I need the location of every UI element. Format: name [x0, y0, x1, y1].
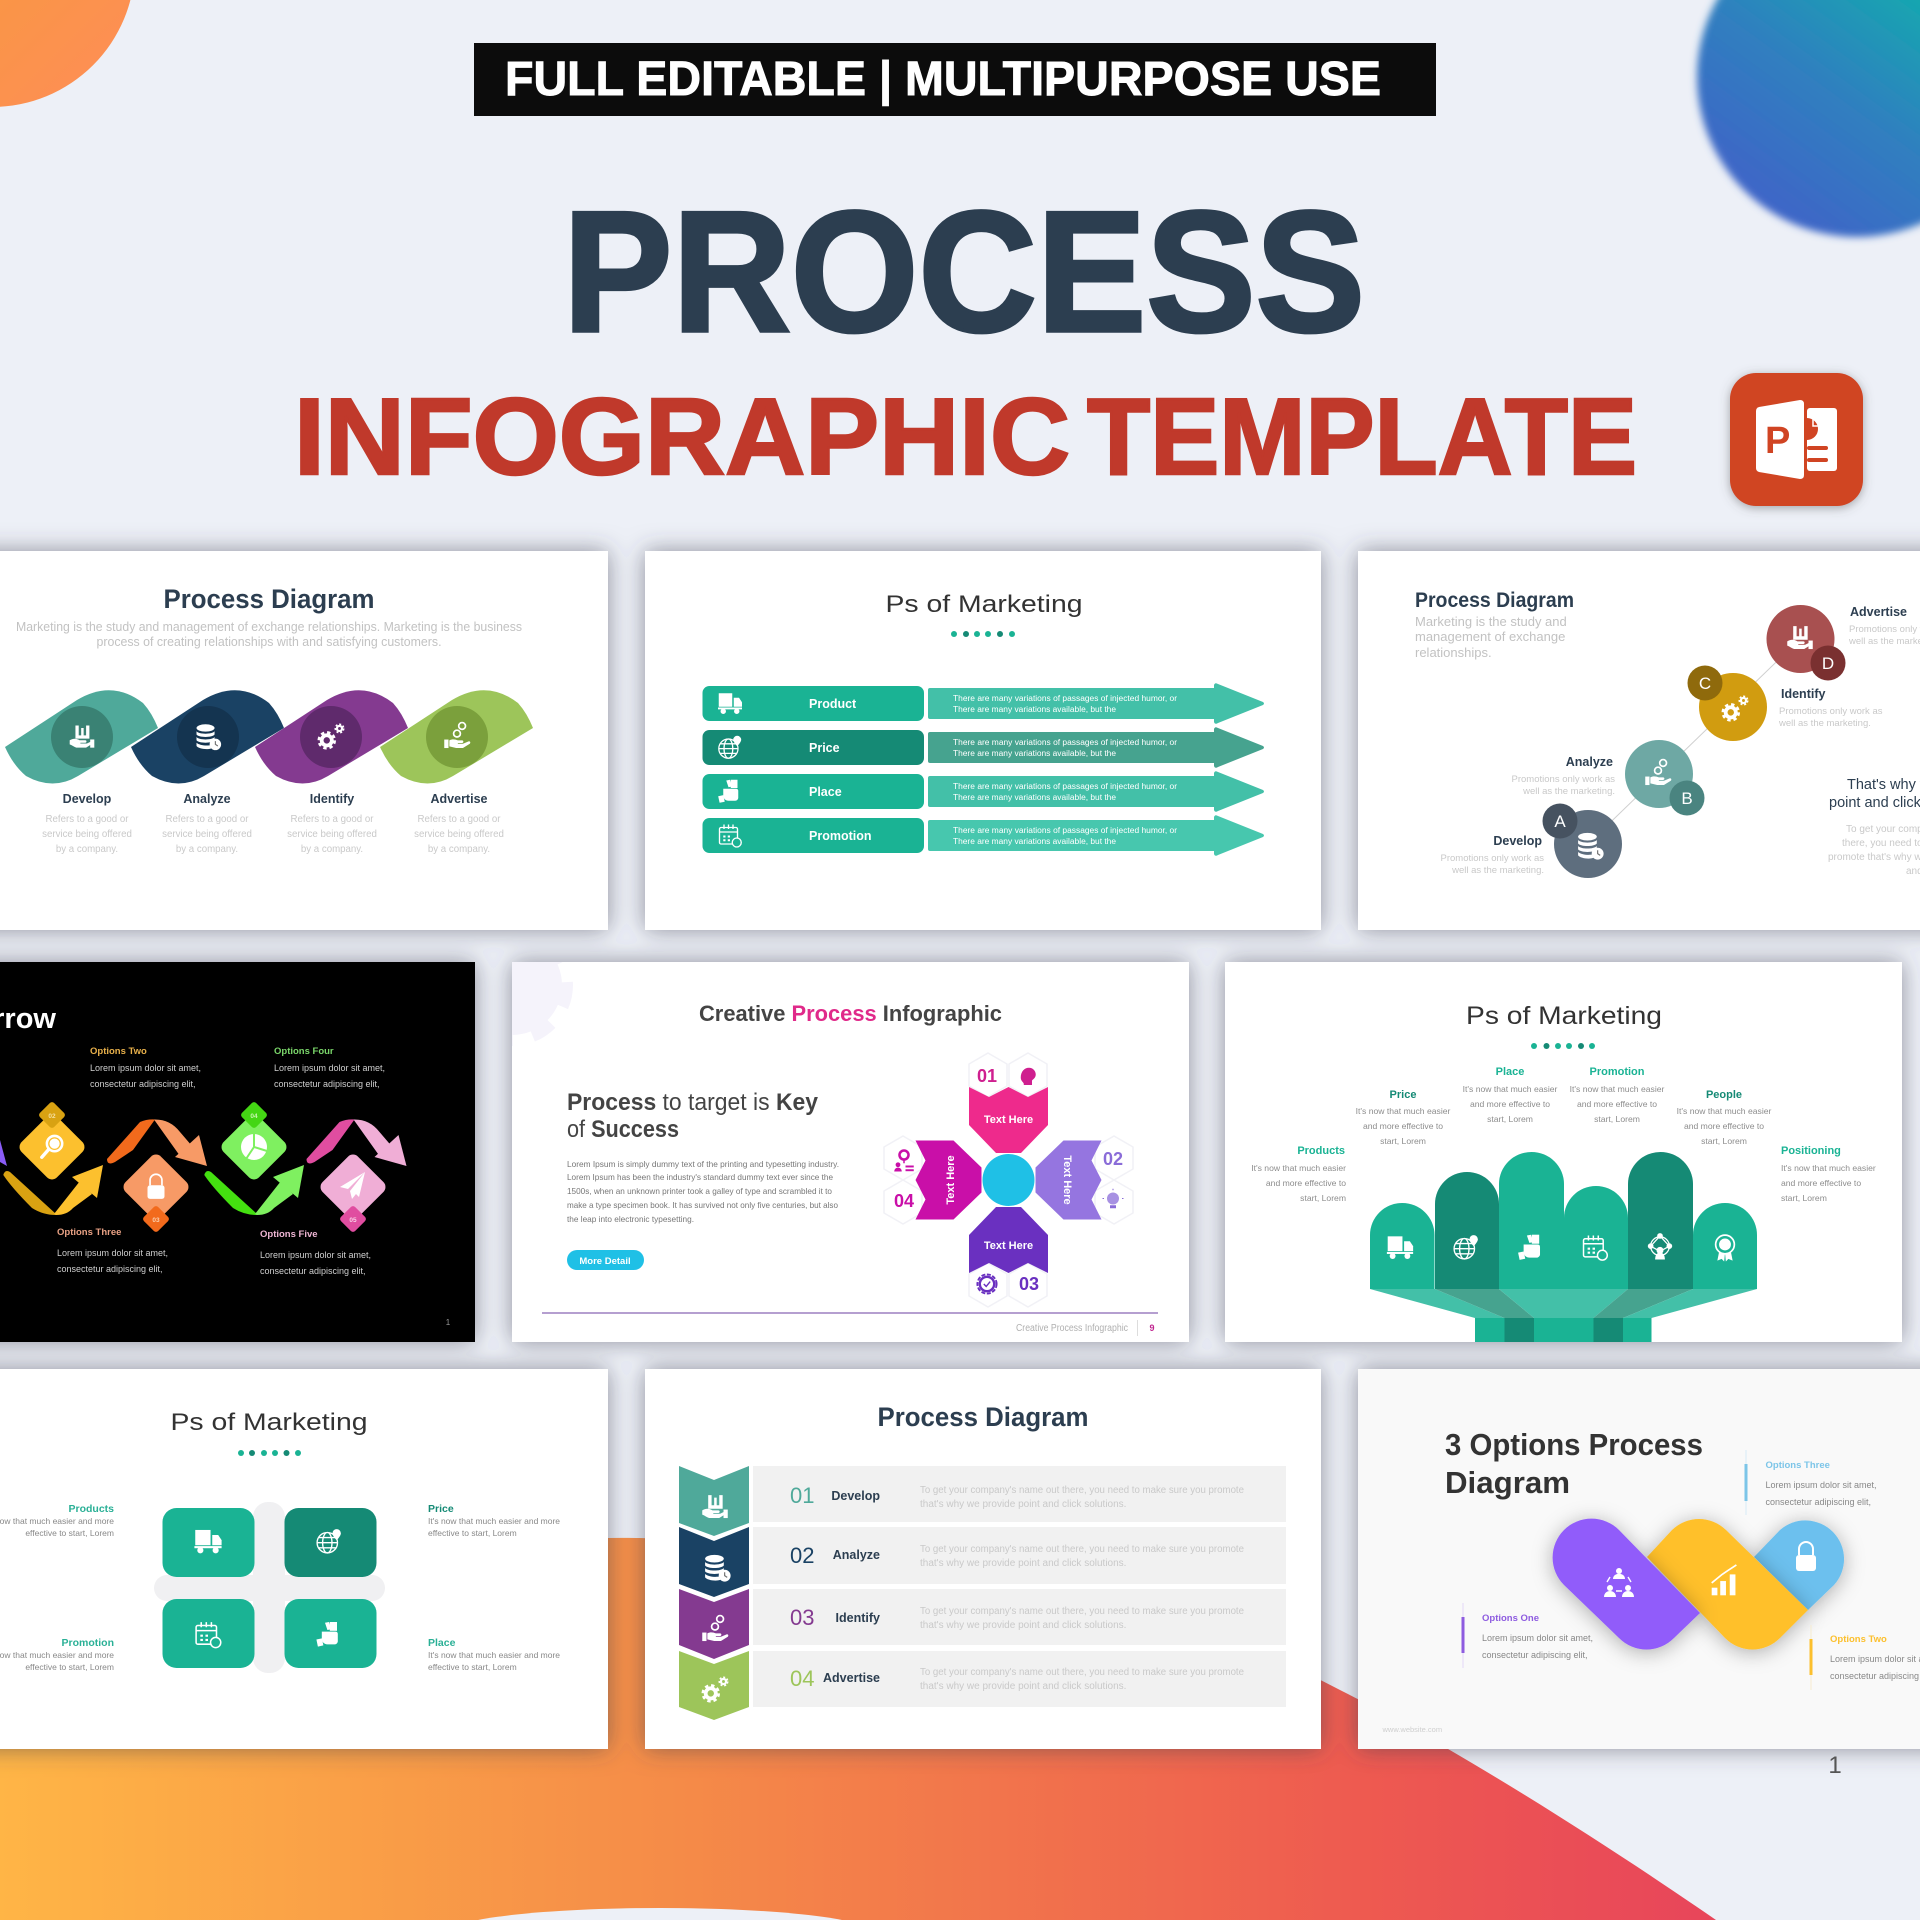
panel: process diagram ribbons — [0, 551, 608, 930]
step captions: service being offered — [414, 829, 504, 840]
option captions: consectetur adipiscing elit, — [260, 1266, 366, 1276]
panel: process diagram list — [645, 1369, 1321, 1749]
page number: 1 — [1828, 1752, 1842, 1779]
row: promotion: There are many variations of passages of injected humor, or — [953, 826, 1177, 835]
row descriptions: that's why we provide point and click solutions. — [920, 1620, 1126, 1631]
row labels: Identify — [836, 1611, 880, 1625]
heading: 3 Options Process — [1445, 1427, 1703, 1462]
option one — [1462, 1603, 1593, 1668]
row descriptions: To get your company's name out there, you need to make sure you promote — [920, 1485, 1244, 1496]
row labels: Develop — [831, 1489, 880, 1503]
body text: 1500s, when an unknown printer took a galley of type and scrambled it to — [567, 1186, 832, 1196]
arm: purple — [969, 1207, 1048, 1273]
step captions: service being offered — [162, 829, 252, 840]
row: promotion: Promotion — [809, 829, 872, 843]
decorative orange-red wave bottom — [0, 1538, 1716, 1920]
node: identify: C — [1699, 674, 1711, 693]
body text: Lorem Ipsum is simply dummy text of the printing and typesetting industry. — [567, 1159, 839, 1169]
grey rows — [753, 1466, 1286, 1707]
option captions: Options Three — [57, 1227, 121, 1238]
node: analyze: B — [1681, 789, 1693, 808]
node: develop: A — [1554, 812, 1566, 831]
tile: calendar — [162, 1599, 254, 1668]
icon: team — [1604, 1568, 1634, 1597]
tagline: Process to target is Key — [567, 1089, 819, 1116]
numbers: 01 — [977, 1066, 997, 1086]
node: advertise: D — [1822, 654, 1834, 673]
node: identify — [1688, 666, 1767, 741]
row labels — [823, 1489, 880, 1685]
top banner — [474, 43, 1436, 116]
numbers: 03 — [1019, 1274, 1039, 1294]
step captions: by a company. — [176, 844, 238, 855]
dots — [1531, 1043, 1595, 1049]
decorative blue circle top right — [1697, 0, 1920, 237]
heading: Process Diagram — [164, 584, 374, 614]
row numbers: 01 — [790, 1483, 814, 1508]
row descriptions — [920, 1485, 1244, 1692]
step captions: Develop — [63, 792, 112, 806]
step captions: Refers to a good or — [166, 814, 249, 825]
body text — [567, 1159, 839, 1224]
option captions: Options Two — [90, 1046, 147, 1057]
row: product: There are many variations of passages of injected humor, or — [953, 694, 1177, 703]
hex icons — [894, 1068, 1124, 1294]
bar: products — [1370, 1203, 1434, 1289]
shape: blue — [1754, 1520, 1844, 1610]
button — [567, 1250, 644, 1270]
captions: and more effective to — [1266, 1178, 1346, 1188]
intro text — [1415, 614, 1567, 660]
bar: positioning — [1693, 1203, 1757, 1289]
option one: Lorem ipsum dolor sit amet, — [1482, 1633, 1593, 1643]
option captions: consectetur adipiscing elit, — [57, 1264, 163, 1274]
node captions: Promotions only work as — [1512, 774, 1615, 785]
chevron: advertise — [679, 1651, 749, 1720]
captions: Products — [1297, 1145, 1345, 1157]
captions: It's now that much easier — [1570, 1084, 1665, 1094]
diamond 02: 02 — [48, 1113, 56, 1120]
node captions: well as the marketing. — [1451, 865, 1544, 876]
row descriptions: To get your company's name out there, you need to make sure you promote — [920, 1544, 1244, 1555]
panel shadows — [0, 551, 1920, 1749]
captions: start, Lorem — [1380, 1136, 1426, 1146]
row: product — [702, 683, 1264, 724]
arrow: green — [204, 1165, 304, 1215]
arm: magenta — [916, 1140, 982, 1220]
captions: effective to start, Lorem — [25, 1528, 114, 1538]
node captions: well as the marketing. — [1778, 718, 1871, 729]
option captions: Lorem ipsum dolor sit amet, — [90, 1063, 201, 1073]
hexagon tabs — [884, 1053, 1133, 1307]
bar: promotion — [1564, 1186, 1628, 1289]
icon: PowerPoint — [1730, 373, 1863, 506]
option one: Options One — [1482, 1613, 1539, 1624]
captions: Positioning — [1781, 1145, 1841, 1157]
captions: It's now that much easier and more — [428, 1516, 560, 1526]
panel: Ps of marketing grid — [0, 1369, 608, 1749]
numbers — [894, 1066, 1123, 1294]
body text: Lorem Ipsum has been the industry's standard dummy text ever since the — [567, 1172, 833, 1182]
panel: creative process infographic — [512, 962, 1158, 1336]
diamond 05 — [318, 1152, 388, 1233]
top banner: FULL EDITABLE | MULTIPURPOSE USE — [505, 53, 1381, 106]
arrow: purple tip — [0, 1140, 7, 1166]
intro text: process of creating relationships with and satisfying customers. — [96, 634, 442, 649]
node captions: well as the marketing. — [1522, 786, 1615, 797]
arm labels: Text Here — [984, 1240, 1033, 1252]
footer: 9 — [1149, 1323, 1155, 1333]
captions: It's now that much easier — [1463, 1084, 1558, 1094]
dots — [951, 631, 1015, 637]
option captions: consectetur adipiscing elit, — [90, 1079, 196, 1089]
row: place: Place — [809, 785, 842, 799]
captions: and more effective to — [1781, 1178, 1861, 1188]
node captions: Analyze — [1566, 755, 1613, 769]
bar: price — [1435, 1172, 1499, 1289]
page number: 1 — [446, 1318, 451, 1327]
arrow: yellow — [3, 1165, 103, 1215]
node captions: Identify — [1781, 687, 1825, 701]
panel: 3 options process — [1358, 1369, 1920, 1749]
arrow: pink — [306, 1119, 406, 1166]
panel: Ps of marketing arrows — [645, 551, 1321, 930]
diamond 03: 03 — [152, 1217, 160, 1224]
tile: globe — [284, 1508, 376, 1577]
tile: money — [284, 1599, 376, 1668]
step captions: by a company. — [301, 844, 363, 855]
tagline: of Success — [567, 1116, 679, 1143]
footer: Creative Process Infographic — [1016, 1323, 1128, 1334]
bar: place — [1499, 1152, 1564, 1289]
chevron: analyze — [679, 1527, 749, 1597]
row: place: There are many variations available, but the — [953, 793, 1117, 802]
arm: violet — [1036, 1140, 1102, 1220]
captions: start, Lorem — [1487, 1114, 1533, 1124]
captions — [0, 1503, 560, 1672]
option three: consectetur adipiscing elit, — [1766, 1497, 1871, 1507]
row: price — [702, 727, 1264, 768]
button: More Detail — [579, 1256, 631, 1267]
step captions: service being offered — [42, 829, 132, 840]
heading — [1445, 1427, 1703, 1500]
node captions: Promotions only work as — [1441, 853, 1544, 864]
diamond 02 — [17, 1101, 87, 1182]
ribbon: identify — [255, 690, 408, 784]
heading: Ps of Marketing — [170, 1409, 368, 1436]
row labels: Analyze — [833, 1548, 880, 1562]
step captions: service being offered — [287, 829, 377, 840]
gear watermark — [512, 962, 573, 1046]
step captions: Refers to a good or — [418, 814, 501, 825]
captions: Price — [1390, 1089, 1416, 1101]
captions: and more effective to — [1684, 1121, 1764, 1131]
heading: Ps of Marketing — [886, 591, 1082, 618]
diamond 05: 05 — [349, 1217, 357, 1224]
option one: consectetur adipiscing elit, — [1482, 1650, 1588, 1660]
captions: Place — [1496, 1066, 1524, 1078]
captions: It's now that much easier — [1677, 1106, 1772, 1116]
node: analyze — [1625, 740, 1704, 816]
captions: It's now that much easier — [1251, 1163, 1346, 1173]
row descriptions: To get your company's name out there, you need to make sure you promote — [920, 1667, 1244, 1678]
row descriptions: that's why we provide point and click solutions. — [920, 1681, 1126, 1692]
row descriptions: To get your company's name out there, you need to make sure you promote — [920, 1606, 1244, 1617]
captions: People — [1706, 1089, 1742, 1101]
panel: dark arrow process — [0, 962, 475, 1342]
row: price: There are many variations of passages of injected humor, or — [953, 738, 1177, 747]
option captions: Options Five — [260, 1229, 318, 1240]
step captions: Identify — [310, 792, 354, 806]
diamond 04: 04 — [250, 1113, 258, 1120]
row: promotion: There are many variations available, but the — [953, 837, 1117, 846]
dots — [238, 1450, 301, 1456]
captions: It's now that much easier — [1781, 1163, 1876, 1173]
hub — [982, 1154, 1034, 1206]
shape: yellow — [1647, 1519, 1808, 1650]
captions: and more effective to — [1470, 1099, 1550, 1109]
heading: Process Diagram — [1415, 589, 1574, 612]
arm: pink — [969, 1087, 1048, 1153]
intro text: relationships. — [1415, 645, 1492, 660]
numbers: 02 — [1103, 1149, 1123, 1169]
captions: Price — [428, 1503, 454, 1515]
option captions: Lorem ipsum dolor sit amet, — [260, 1250, 371, 1260]
node: advertise — [1766, 605, 1846, 680]
captions: Products — [68, 1503, 114, 1515]
captions: and more effective to — [1363, 1121, 1443, 1131]
captions: effective to start, Lorem — [428, 1528, 517, 1538]
row: promotion — [702, 815, 1264, 856]
row: price: Price — [809, 741, 840, 755]
option two: Options Two — [1830, 1634, 1887, 1645]
row: place — [702, 771, 1264, 812]
body text: the leap into electronic typesetting. — [567, 1214, 694, 1224]
step captions: Advertise — [431, 792, 488, 806]
captions: and more effective to — [1577, 1099, 1657, 1109]
intro text — [16, 619, 522, 649]
node captions: Promotions only work as — [1779, 706, 1883, 717]
heading: Ps of Marketing — [1466, 1002, 1662, 1030]
chevron: identify — [679, 1589, 749, 1659]
icon: lock — [1796, 1542, 1816, 1571]
row descriptions: that's why we provide point and click solutions. — [920, 1558, 1126, 1569]
captions: Promotion — [1590, 1066, 1645, 1078]
option three: Options Three — [1766, 1460, 1830, 1471]
step captions: Refers to a good or — [291, 814, 374, 825]
icon: chart — [1712, 1565, 1736, 1595]
chevron: develop — [679, 1466, 749, 1536]
tile: truck — [162, 1508, 254, 1577]
footer — [542, 1313, 1158, 1336]
captions: effective to start, Lorem — [428, 1662, 517, 1672]
step captions: by a company. — [428, 844, 490, 855]
body text: make a type specimen book. It has survived not only five centuries, but also — [567, 1200, 838, 1210]
tagline — [567, 1089, 819, 1143]
icon: PowerPoint: P — [1765, 420, 1790, 462]
captions: start, Lorem — [1300, 1193, 1346, 1203]
captions: Promotion — [62, 1637, 114, 1649]
shape: purple — [1553, 1519, 1700, 1650]
row numbers: 03 — [790, 1605, 814, 1630]
heading: Process Diagram — [878, 1402, 1088, 1432]
arm labels: Text Here — [1061, 1155, 1073, 1205]
captions: It's now that much easier and more — [428, 1650, 560, 1660]
row numbers: 04 — [790, 1666, 814, 1691]
row: product: There are many variations available, but the — [953, 705, 1117, 714]
option two — [1810, 1625, 1920, 1690]
ribbon: analyze — [131, 690, 284, 784]
row descriptions: that's why we provide point and click solutions. — [920, 1499, 1126, 1510]
step captions: Refers to a good or — [46, 814, 129, 825]
arm labels: Text Here — [984, 1114, 1033, 1126]
option captions — [57, 1046, 385, 1276]
row numbers: 02 — [790, 1543, 814, 1568]
option captions: Options Four — [274, 1046, 334, 1057]
grey cross — [154, 1502, 385, 1673]
bar: people — [1628, 1152, 1693, 1289]
node captions: Advertise — [1850, 605, 1907, 619]
option captions: Lorem ipsum dolor sit amet, — [57, 1248, 168, 1258]
title: PROCESS: PROCESS — [563, 176, 1365, 368]
step captions — [42, 792, 504, 855]
row labels: Advertise — [823, 1671, 880, 1685]
row: place: There are many variations of passages of injected humor, or — [953, 782, 1177, 791]
option three — [1744, 1450, 1877, 1515]
row numbers — [790, 1483, 814, 1691]
node: develop — [1542, 804, 1622, 878]
decorative orange circle top left — [0, 0, 135, 107]
numbers: 04 — [894, 1191, 914, 1211]
captions: effective to start, Lorem — [25, 1662, 114, 1672]
side note — [1828, 777, 1920, 877]
diamond 03 — [121, 1152, 191, 1233]
captions: start, Lorem — [1781, 1193, 1827, 1203]
website: www.website.com — [1382, 1725, 1442, 1734]
heading: Creative Process Infographic — [699, 1001, 1002, 1026]
captions: Place — [428, 1637, 456, 1649]
decorative light arc bottom — [450, 1908, 870, 1920]
subtitle: INFOGRAPHIC TEMPLATE: TEMPLATE — [1087, 376, 1637, 498]
step captions: by a company. — [56, 844, 118, 855]
row: product: Product — [809, 697, 857, 711]
option captions: Lorem ipsum dolor sit amet, — [274, 1063, 385, 1073]
panel: Ps of marketing bars — [1225, 962, 1902, 1342]
heading: Diagram — [1445, 1465, 1570, 1500]
captions — [1251, 1066, 1876, 1203]
step captions: Analyze — [183, 792, 231, 806]
intro text: Marketing is the study and management of exchange relationships. Marketing is the business — [16, 619, 522, 634]
arrow: orange — [107, 1119, 207, 1166]
node captions: Develop — [1493, 834, 1542, 848]
subtitle: INFOGRAPHIC TEMPLATE — [294, 376, 1637, 498]
option three: Lorem ipsum dolor sit amet, — [1766, 1480, 1877, 1490]
ribbon: advertise — [380, 690, 533, 784]
intro text: Marketing is the study and — [1415, 614, 1567, 629]
row: price: There are many variations available, but the — [953, 749, 1117, 758]
captions: start, Lorem — [1701, 1136, 1747, 1146]
panel: process diagram circles — [1358, 551, 1920, 930]
subtitle: INFOGRAPHIC TEMPLATE: INFOGRAPHIC — [294, 376, 1070, 498]
captions: It's now that much easier — [1356, 1106, 1451, 1116]
funnel — [1370, 1289, 1757, 1342]
option captions: consectetur adipiscing elit, — [274, 1079, 380, 1089]
node captions — [1441, 605, 1920, 876]
diamond 04 — [219, 1101, 289, 1182]
ribbon: develop — [5, 690, 158, 784]
arm labels — [945, 1114, 1073, 1252]
connector line — [1588, 639, 1800, 844]
intro text: management of exchange — [1415, 629, 1565, 644]
captions: start, Lorem — [1594, 1114, 1640, 1124]
arm labels: Text Here — [945, 1155, 957, 1205]
